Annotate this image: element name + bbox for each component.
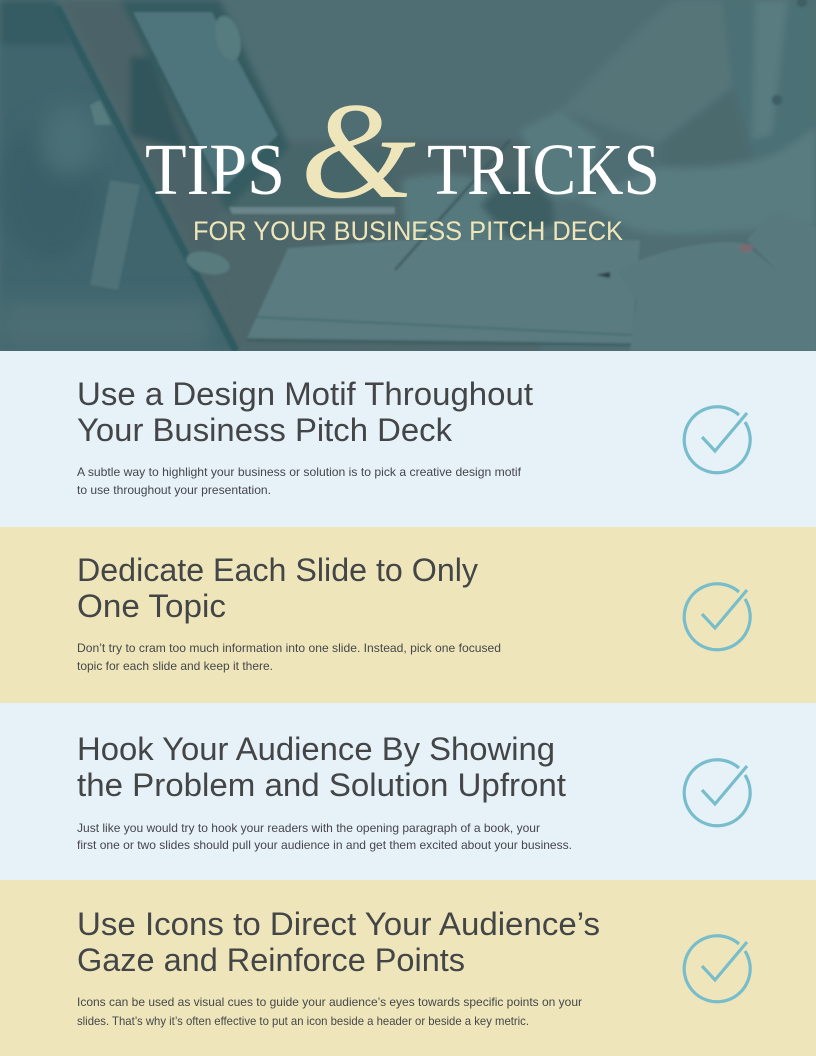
text: tip 2 — [77, 641, 501, 673]
heading: tip 2: One Topic — [77, 588, 226, 624]
icon: check mark 2 — [684, 584, 750, 650]
title — [145, 74, 660, 227]
text: tip 3: first one or two slides should pull your audience in and get them excited about your business. — [77, 838, 572, 852]
panel: tip 3 — [0, 703, 816, 880]
icon: check mark 1 — [684, 407, 750, 473]
heading: tip 3: the Problem and Solution Upfront — [77, 767, 566, 803]
heading: tip 3: Hook Your Audience By Showing — [77, 731, 555, 767]
heading: tip 3 — [77, 731, 566, 803]
text: tip 1: to use throughout your presentation. — [77, 483, 271, 497]
icon: check mark 4 — [684, 936, 750, 1002]
panel: tip 2 — [0, 527, 816, 703]
text: tip 1: A subtle way to highlight your business or solution is to pick a creative design motif — [77, 465, 522, 479]
heading: tip 1: Use a Design Motif Throughout — [77, 376, 533, 412]
text: tip 3: Just like you would try to hook your readers with the opening paragraph of a book, your — [77, 821, 540, 835]
title word: TIPS: TIPS — [145, 129, 285, 210]
text: tip 4: Icons can be used as visual cues to guide your audience’s eyes towards specific points on your — [77, 995, 582, 1009]
heading: tip 2: Dedicate Each Slide to Only — [77, 552, 478, 588]
heading: tip 2 — [77, 552, 478, 624]
heading: tip 1: Your Business Pitch Deck — [77, 412, 453, 448]
subtitle: FOR YOUR BUSINESS PITCH DECK — [193, 216, 623, 246]
panel: tip 1 — [0, 351, 816, 527]
heading: tip 4: Use Icons to Direct Your Audience’s — [77, 906, 600, 942]
title ampersand: & — [300, 74, 416, 227]
text: tip 4 — [77, 995, 582, 1028]
icon: check mark 3 — [684, 760, 750, 826]
text: tip 2: topic for each slide and keep it there. — [77, 659, 273, 673]
text: tip 4: slides. That’s why it’s often effective to put an icon beside a header or beside a key metric. — [77, 1014, 529, 1028]
heading: tip 4: Gaze and Reinforce Points — [77, 942, 465, 978]
text: tip 3 — [77, 821, 572, 852]
title word: TRICKS: TRICKS — [427, 129, 660, 210]
panel: tip 4 — [0, 880, 816, 1056]
heading: tip 4 — [77, 906, 600, 978]
hero photo background — [0, 0, 816, 351]
text: tip 2: Don’t try to cram too much information into one slide. Instead, pick one focused — [77, 641, 501, 655]
text: tip 1 — [77, 465, 522, 497]
heading: tip 1 — [77, 376, 533, 448]
